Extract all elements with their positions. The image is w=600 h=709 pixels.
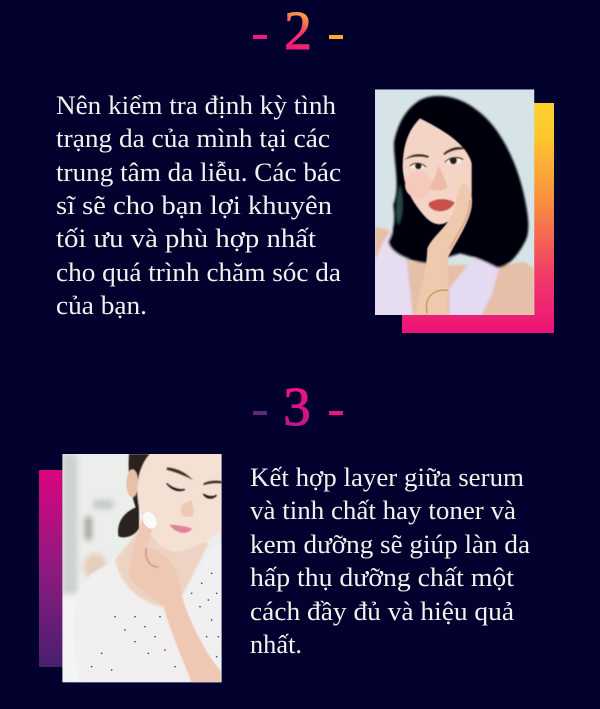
hair (117, 454, 150, 538)
brows, eyes, lips, nose (167, 467, 193, 480)
heading: step number 2 (253, 0, 343, 61)
text block: step 3 advice: nhất. (250, 630, 302, 659)
text block: step 3 advice: Kết hợp layer giữa serum (250, 463, 524, 492)
face (137, 454, 222, 552)
ear (126, 469, 138, 497)
brows, eyes, lips (404, 154, 429, 160)
photo: woman with black hair touching her cheek (375, 89, 534, 315)
photo: woman applying cotton pad to her cheek (62, 454, 222, 682)
cotton pad (142, 512, 156, 529)
heading: step number 3: 3 (283, 376, 311, 437)
face (403, 118, 472, 224)
text block: step 2 advice: sĩ sẽ cho bạn lợi khuyên (56, 191, 332, 220)
hand and wrist (415, 183, 472, 315)
gradient block behind photo: magenta to purple (39, 470, 63, 667)
text block: step 3 advice: cách đầy đủ và hiệu quả (250, 597, 514, 626)
text block: step 2 advice: Nên kiểm tra định kỳ tình (56, 91, 336, 120)
nose shadow (430, 165, 448, 190)
text block: step 3 advice: hấp thụ dưỡng chất một (250, 563, 515, 592)
text block: step 3 advice (250, 463, 530, 659)
lavender dress (375, 230, 413, 315)
text block: step 2 advice: tối ưu và phù hợp nhất (56, 224, 317, 253)
text block: step 2 advice (56, 91, 341, 320)
shoulders and chest skin (375, 227, 534, 315)
text block: step 3 advice: kem dưỡng sẽ giúp làn da (250, 530, 530, 559)
text block: step 2 advice: cho quá trình chăm sóc da (56, 258, 341, 287)
blouse dots (91, 572, 219, 671)
heading: step number 2: 2 (284, 0, 312, 61)
gradient block behind photo: yellow to pink (402, 103, 554, 333)
text block: step 3 advice: và tinh chất hay toner và (250, 496, 516, 525)
text block: step 2 advice: trạng da của mình tại các (56, 124, 330, 153)
neck and chest skin (115, 527, 208, 607)
text block: step 2 advice: của bạn. (56, 291, 147, 320)
text block: step 2 advice: trung tâm da liễu. Các bác (56, 158, 341, 187)
heading: step number 3 (253, 376, 343, 437)
hair (388, 96, 528, 268)
bracelet (426, 290, 448, 313)
white polka-dot blouse (74, 543, 222, 682)
finger, hand and forearm (128, 518, 221, 682)
